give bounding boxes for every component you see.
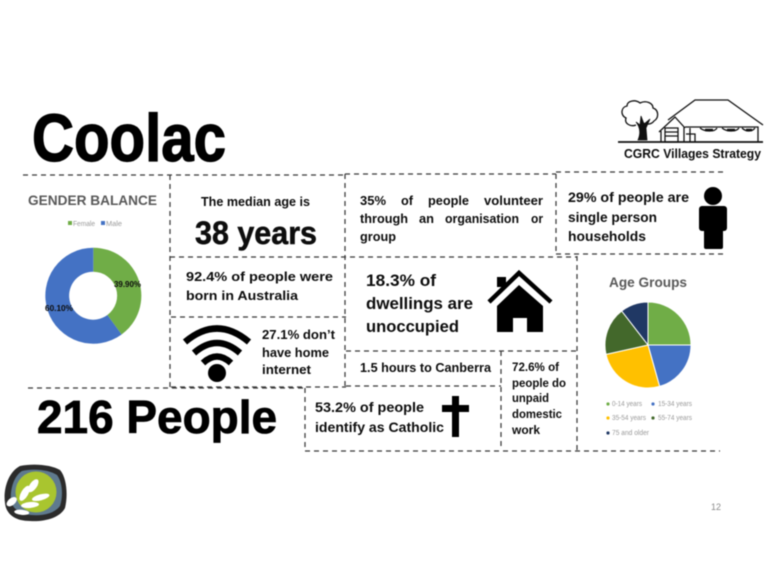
panel: volunteering: 35%: [360, 194, 386, 208]
panel: volunteering: through: [360, 212, 408, 226]
religion text: identify as Catholic: [315, 420, 445, 435]
chart heading: Age Groups: [609, 274, 687, 290]
donut chart: 60.10%: [45, 303, 73, 313]
panel: religion: [315, 396, 469, 437]
panel: gender balance donut chart: [28, 192, 157, 344]
chart legend: Female: [73, 221, 95, 228]
panel: median age: [195, 195, 317, 251]
panel: volunteering: or: [531, 212, 543, 226]
dwellings text: unoccupied: [366, 317, 459, 336]
religion text: 53.2% of people: [315, 400, 425, 415]
chart legend: 15-34 years: [658, 401, 692, 408]
chart legend: 0-14 years: [612, 401, 642, 408]
chart legend: 75 and older: [612, 430, 650, 437]
chart legend: 35-54 years: [612, 415, 646, 422]
panel: unpaid domestic work: work: [511, 423, 540, 437]
donut chart: 39.90%: [114, 279, 141, 289]
panel: volunteering: an: [419, 212, 434, 226]
chart heading: GENDER BALANCE: [28, 192, 157, 208]
panel: unpaid domestic work: domestic: [512, 407, 562, 421]
median age label: The median age is: [201, 195, 310, 209]
panel: distance to Canberra: 1.5 hours to Canberra: [360, 361, 492, 375]
chart legend: 55-74 years: [658, 415, 692, 422]
dwellings text: dwellings are: [366, 294, 473, 313]
panel: born in Australia: 92.4% of people were: [186, 269, 333, 284]
logo caption: CGRC Villages Strategy: [624, 147, 761, 161]
panel: single person households: [568, 187, 727, 249]
panel: home internet: [185, 327, 336, 382]
icon: council leaf logo: [5, 465, 67, 521]
internet text: have home: [262, 345, 329, 360]
icon: house: [489, 273, 551, 332]
internet text: internet: [262, 362, 312, 377]
panel: volunteering: people: [428, 194, 469, 208]
panel: volunteering: volunteer: [484, 194, 543, 208]
icon: wifi: [185, 328, 249, 382]
icon: cross: [442, 396, 469, 437]
panel: unpaid domestic work: people do: [512, 376, 566, 390]
panel: volunteering: group: [360, 230, 396, 244]
households text: 29% of people are: [568, 190, 690, 205]
panel: age groups pie chart: [605, 274, 692, 437]
chart legend: [606, 401, 692, 437]
chart legend: [68, 221, 122, 228]
panel: volunteering: organisation: [445, 212, 519, 226]
title: Coolac: [32, 101, 226, 176]
icon: tree and house line drawing: [618, 100, 763, 142]
panel: unoccupied dwellings: [366, 271, 551, 336]
dwellings text: 18.3% of: [366, 271, 436, 290]
headline: population: 216 People: [37, 391, 277, 443]
panel: unpaid domestic work: unpaid: [512, 391, 549, 405]
internet text: 27.1% don’t: [262, 327, 336, 342]
pie chart: [605, 302, 691, 388]
median age value: 38 years: [195, 215, 317, 251]
households text: single person: [568, 210, 657, 225]
logo: CGRC Villages Strategy: [618, 100, 763, 161]
chart legend: Male: [106, 221, 122, 228]
households text: households: [568, 229, 646, 244]
donut chart: [45, 248, 141, 344]
panel: born in Australia: born in Australia: [186, 288, 299, 303]
panel: volunteering: of: [401, 194, 414, 208]
icon: person: [699, 187, 727, 249]
page number: 12: [711, 502, 721, 512]
panel: unpaid domestic work: 72.6% of: [512, 360, 560, 374]
